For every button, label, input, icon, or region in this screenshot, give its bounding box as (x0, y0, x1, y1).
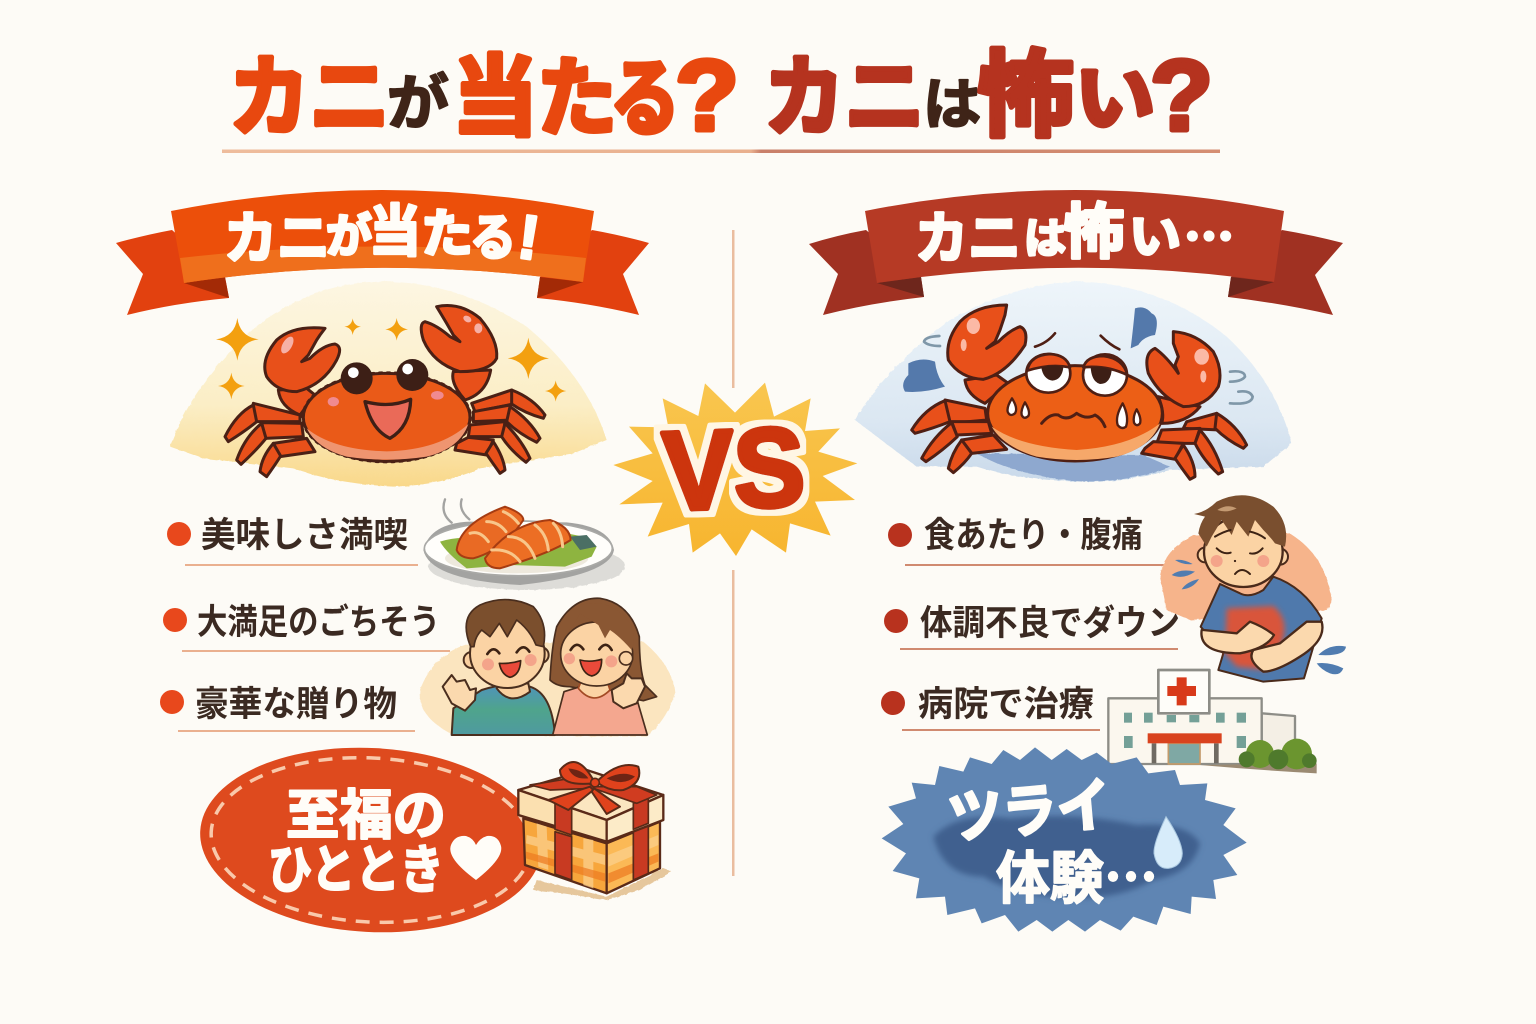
title: 当 (452, 48, 538, 147)
item: delicious: 美味しさ満喫 (201, 516, 408, 555)
title (229, 40, 1213, 152)
callout text: 至福の (286, 786, 446, 846)
callout: painful experience (882, 747, 1247, 932)
illustration: gift box (518, 762, 672, 900)
title: た (537, 51, 617, 147)
callout text: ひととき (268, 842, 444, 900)
item: food poisoning (888, 516, 1165, 566)
illustration: sad crab (855, 282, 1292, 482)
item: gift (160, 685, 415, 732)
illustration: hospital (1108, 670, 1317, 773)
list: downsides (881, 516, 1180, 731)
title: が (387, 70, 449, 137)
banner heading: た (421, 206, 473, 264)
callout text (946, 774, 1158, 915)
banner heading: カニ (915, 207, 1021, 270)
title: は (923, 73, 981, 136)
banner heading: … (1184, 198, 1234, 270)
VS lettering: VS (660, 404, 807, 534)
icon: water drop (1154, 817, 1182, 868)
callout: bliss (195, 739, 547, 941)
illustration: sick boy (1160, 495, 1346, 682)
illustration: crab dish (423, 499, 625, 590)
item: feast: 大満足のごちそう (197, 603, 440, 642)
VS starburst (613, 383, 857, 556)
illustration: happy couple (420, 598, 675, 737)
callout text: 体験… (996, 833, 1158, 915)
banner heading: カニ (224, 207, 330, 270)
banner heading: い (1129, 211, 1181, 264)
icon: heart (450, 836, 501, 880)
title underline (222, 150, 1220, 153)
illustration: happy crab (170, 282, 607, 487)
item: hospital (881, 685, 1100, 731)
banner heading: 怖 (1063, 199, 1125, 266)
callout text: ツライ (946, 774, 1114, 852)
divider top (732, 230, 734, 388)
banner heading (224, 200, 543, 274)
title: い (1075, 57, 1155, 140)
title: ? (1150, 40, 1213, 152)
item: unwell: 体調不良でダウン (920, 603, 1180, 643)
banner heading: 当 (369, 200, 421, 263)
banner heading: が (326, 210, 372, 262)
title: 怖 (977, 43, 1075, 148)
title: ? (675, 40, 739, 152)
item: gift: 豪華な贈り物 (195, 685, 397, 724)
item: hospital: 病院で治療 (918, 685, 1094, 724)
divider bottom (732, 570, 734, 876)
banner heading (915, 198, 1234, 270)
title: カニ (764, 48, 925, 147)
list: benefits (160, 516, 450, 732)
item: delicious (167, 516, 418, 566)
title: る (610, 52, 680, 146)
item: unwell (884, 603, 1180, 650)
callout text (268, 786, 446, 900)
banner: left (116, 190, 649, 315)
banner heading: ! (514, 203, 543, 274)
title: カニ (229, 48, 390, 147)
banner heading: る (470, 210, 516, 266)
banner heading: は (1024, 215, 1066, 262)
item: food poisoning: 食あたり・腹痛 (924, 516, 1143, 555)
item: feast (163, 603, 450, 652)
banner: right (809, 190, 1343, 315)
